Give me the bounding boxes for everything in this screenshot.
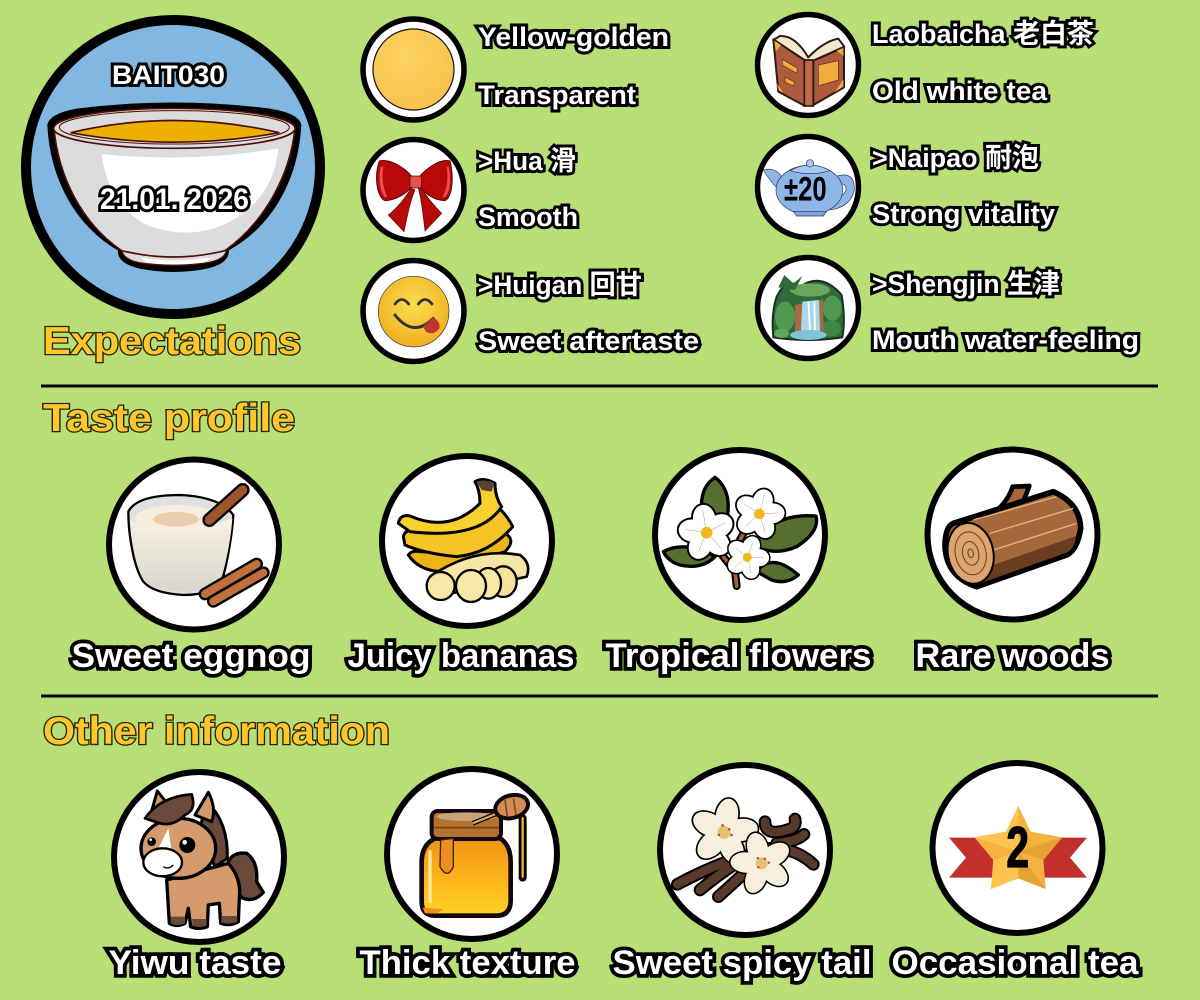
text: sweet spicy tail: Sweet spicy tail	[612, 944, 872, 982]
text: yiwu taste: Yiwu taste	[108, 944, 282, 982]
text: laobaicha: Laobaicha 老白茶	[872, 19, 1094, 49]
icon: teapot 20 infusions: ±20	[784, 171, 827, 209]
code label: BAIT030	[112, 60, 225, 90]
text: occasional tea: Occasional tea	[892, 944, 1140, 982]
heading: expectations: Expectations	[43, 320, 301, 363]
icon: tea colour	[363, 19, 464, 120]
panel: huigan	[363, 260, 699, 362]
icon: cute horse	[114, 772, 284, 942]
text: shengjin: >Shengjin 生津	[872, 269, 1060, 299]
icon: tea bowl	[49, 104, 299, 270]
icon: bananas	[382, 456, 552, 626]
panel: bananas	[348, 456, 574, 675]
icon: star rating 2 on ribbon	[932, 763, 1102, 933]
panel: laobaicha	[758, 14, 1094, 116]
icon: smiley tongue	[363, 260, 464, 362]
panel: colour	[363, 19, 669, 120]
date label: 21.01. 2026	[100, 183, 249, 216]
text: sweet aftertaste: Sweet aftertaste	[478, 326, 699, 356]
heading: other information: Other information	[43, 710, 390, 753]
icon: honey jar	[387, 769, 557, 939]
text: old white tea: Old white tea	[872, 76, 1048, 106]
panel: naipao	[758, 136, 1055, 238]
text: transparent: Transparent	[478, 80, 636, 110]
icon: tropical flowers	[655, 450, 825, 620]
text: tropical flowers: Tropical flowers	[606, 637, 872, 675]
text: strong vitality: Strong vitality	[872, 199, 1055, 229]
panel: thick texture	[360, 769, 576, 982]
icon: wood log	[928, 450, 1098, 620]
text: rare woods: Rare woods	[916, 637, 1110, 675]
panel: occasional tea	[892, 763, 1140, 982]
panel: tea bowl badge	[26, 20, 320, 314]
text: smooth: Smooth	[478, 202, 578, 232]
text: thick texture: Thick texture	[360, 944, 576, 982]
badge circle	[26, 20, 320, 314]
icon: teapot 20 infusions	[758, 136, 858, 238]
panel: shengjin	[758, 258, 1139, 358]
icon: star rating 2 on ribbon: 2	[1006, 816, 1029, 880]
text: sweet eggnog: Sweet eggnog	[72, 637, 310, 675]
icon: vanilla flowers and pods	[660, 765, 830, 935]
text: yellow-golden: Yellow-golden	[478, 22, 669, 52]
text: hua: >Hua 滑	[478, 146, 576, 176]
heading: taste profile: Taste profile	[43, 397, 295, 440]
icon: eggnog glass with cinnamon	[109, 460, 279, 630]
panel: sweet spicy tail	[612, 765, 872, 982]
text: juicy bananas: Juicy bananas	[348, 637, 574, 675]
panel: hua	[363, 140, 578, 240]
icon: red bow	[363, 140, 464, 240]
panel: yiwu	[108, 772, 284, 982]
panel: rare woods	[916, 450, 1110, 675]
text: huigan: >Huigan 回甘	[478, 270, 642, 300]
panel: flowers	[606, 450, 872, 675]
icon: jungle waterfall	[758, 258, 858, 358]
icon: old book	[758, 14, 858, 116]
panel: eggnog	[72, 460, 310, 675]
text: naipao: >Naipao 耐泡	[872, 143, 1039, 173]
text: mouth water-feeling: Mouth water-feeling	[872, 325, 1139, 355]
